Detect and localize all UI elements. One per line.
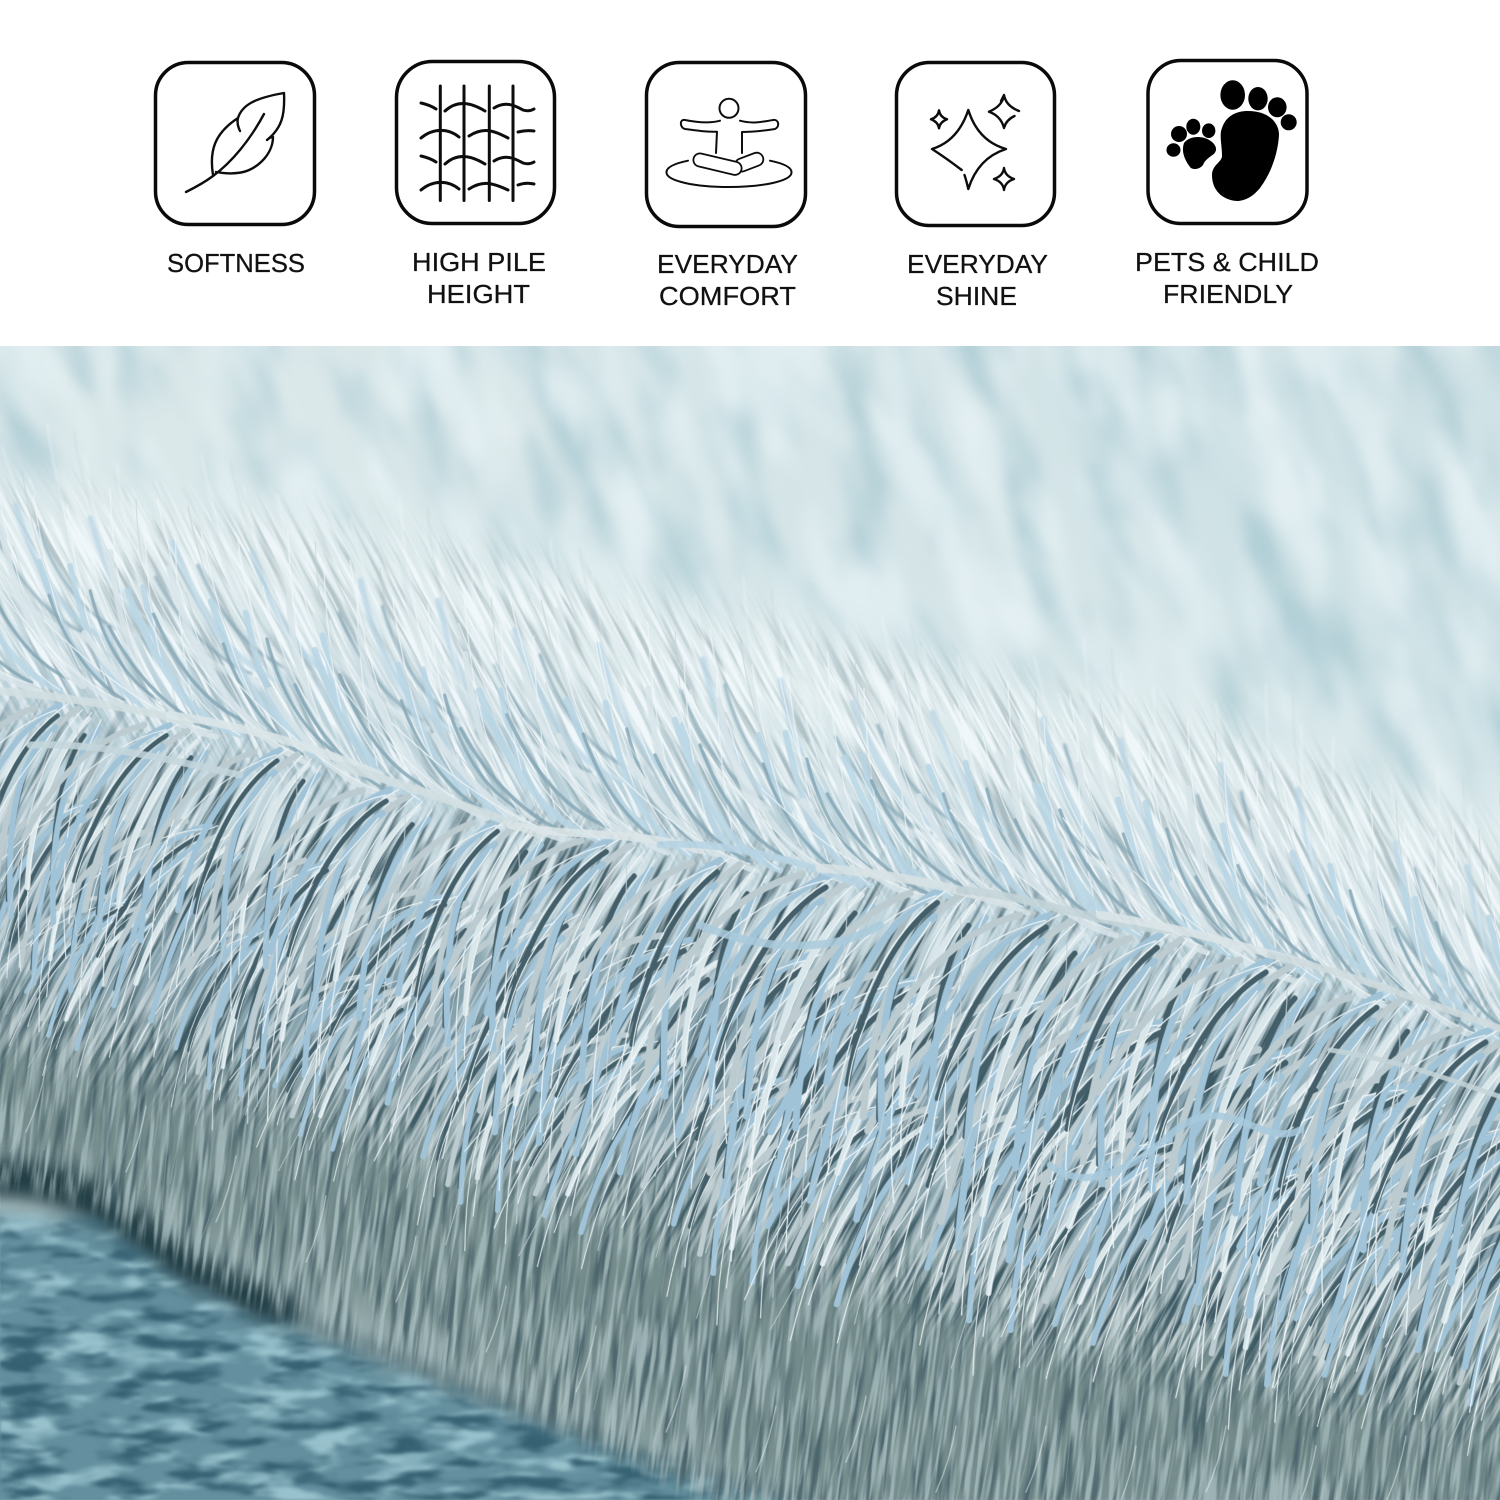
label: everyday comfort [657,249,798,311]
label: pets and child friendly [1135,247,1319,309]
blurred background pile [0,346,1500,816]
panel: feature icon row [156,60,1319,311]
feature: everyday shine [896,62,1054,311]
label: everyday comfort: COMFORT [659,281,796,311]
label: high pile height [412,247,546,309]
label: pets and child friendly: FRIENDLY [1163,279,1293,309]
lower strand texture [0,686,1500,1454]
grey skirt of fine fibres [0,971,1500,1500]
feature: softness [156,62,314,278]
feature: pets and child friendly [1135,60,1319,309]
icon: feather [156,62,314,224]
icon: sparkles [896,62,1054,226]
icon: seated figure on rug [646,62,806,226]
teal lower pile [0,1214,774,1500]
panel: white header background [0,0,1500,346]
feature: everyday comfort [646,62,806,311]
icon: pile grid [396,62,554,224]
icon: foot and paw prints [1148,60,1307,224]
label: softness: SOFTNESS [167,248,305,278]
upper strand texture [0,478,1500,1042]
label: high pile height: HIGH PILE [412,247,546,277]
label: high pile height: HEIGHT [427,279,530,309]
feature: high pile height [396,62,554,309]
photo base tones [0,346,1500,1500]
label: everyday shine [907,249,1048,311]
label: everyday shine: EVERYDAY [907,249,1048,279]
label: everyday comfort: EVERYDAY [657,249,798,279]
label: pets and child friendly: PETS & CHILD [1135,247,1319,277]
label: everyday shine: SHINE [936,281,1017,311]
panel: rug close-up photo illustration [0,346,1500,1500]
yarn strands and spine [0,346,1500,1500]
